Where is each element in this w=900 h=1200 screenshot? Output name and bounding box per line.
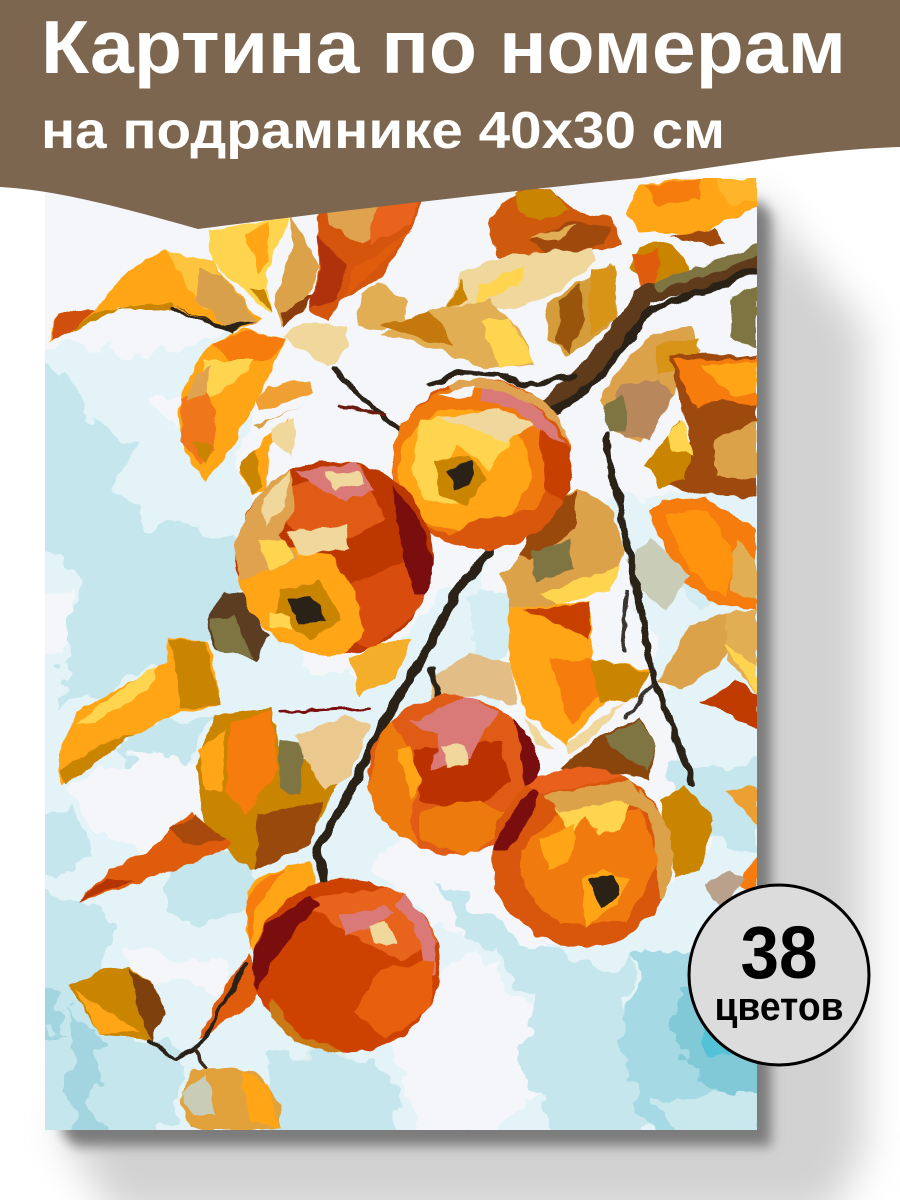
- subtitle: на подрамнике 40х30 см: [41, 102, 725, 160]
- painting canvas: [30, 178, 780, 1150]
- leaf: big mixed left: [196, 708, 370, 870]
- leaf: center tan over olive: [500, 488, 625, 608]
- leaf: right of blue branch: [625, 538, 757, 910]
- apple: bottom: [250, 879, 441, 1060]
- sky: blue washes: [30, 332, 780, 1150]
- leaf: small tan: [358, 282, 408, 330]
- leaf: top rust cluster: [487, 187, 622, 258]
- header banner: [0, 0, 900, 229]
- leaf: cream strip: [565, 700, 625, 755]
- apple: middle: [368, 695, 545, 856]
- leaf: small orange under apple 2: [350, 640, 412, 695]
- leaf: orange above apple 5: [246, 860, 316, 958]
- leaf: olive: [560, 718, 656, 780]
- leaf: stem orange: [198, 955, 265, 1040]
- leaf: cream: [282, 323, 348, 368]
- leaf: rust lower left: [78, 812, 230, 903]
- badge: 38 colours: 38: [740, 911, 818, 994]
- leaves: small middle left: [240, 380, 312, 495]
- leaf: ochre right lower: [658, 610, 757, 695]
- title: Картина по номерам: [41, 5, 846, 89]
- leaf: cream lower center: [525, 715, 555, 750]
- leaf: olive small left: [206, 593, 268, 660]
- leaf: red right: [700, 680, 757, 728]
- canvas drop shadow: [60, 195, 865, 1200]
- leaf: big orange left: [177, 328, 285, 483]
- leaf: center orange lower: [508, 602, 648, 745]
- apple: top center: [392, 379, 575, 560]
- leaf: bottom: [180, 1068, 280, 1130]
- leaf: small above apple 3: [430, 652, 518, 705]
- leaf: top right olive: [730, 285, 757, 350]
- branches: [147, 250, 757, 1068]
- leaf: brown ochre center: [545, 262, 618, 355]
- apple: lower right: [490, 762, 678, 947]
- leaf: ochre under top right: [630, 243, 692, 292]
- leaf: yellow left: [58, 638, 222, 785]
- leaf: yellow upper: [208, 217, 320, 327]
- leaf: yellow tan center: [380, 300, 535, 368]
- leaf: right orange large: [645, 352, 757, 498]
- leaf: right tan group: [600, 325, 700, 445]
- apple: left: [232, 461, 440, 660]
- leaf: ochre lower left: [68, 968, 165, 1040]
- badge: 38 colours: цветов: [714, 985, 844, 1029]
- leaf: rust upper: [308, 195, 422, 323]
- badge: 38 colours: [689, 885, 869, 1065]
- leaf: far left: [48, 250, 263, 343]
- leaf: orange right middle: [648, 498, 757, 610]
- paint layer: leaves, branches and apples: [48, 178, 757, 1130]
- leaf: top right orange: [625, 178, 757, 245]
- leaf: pale yellow center top: [445, 250, 595, 312]
